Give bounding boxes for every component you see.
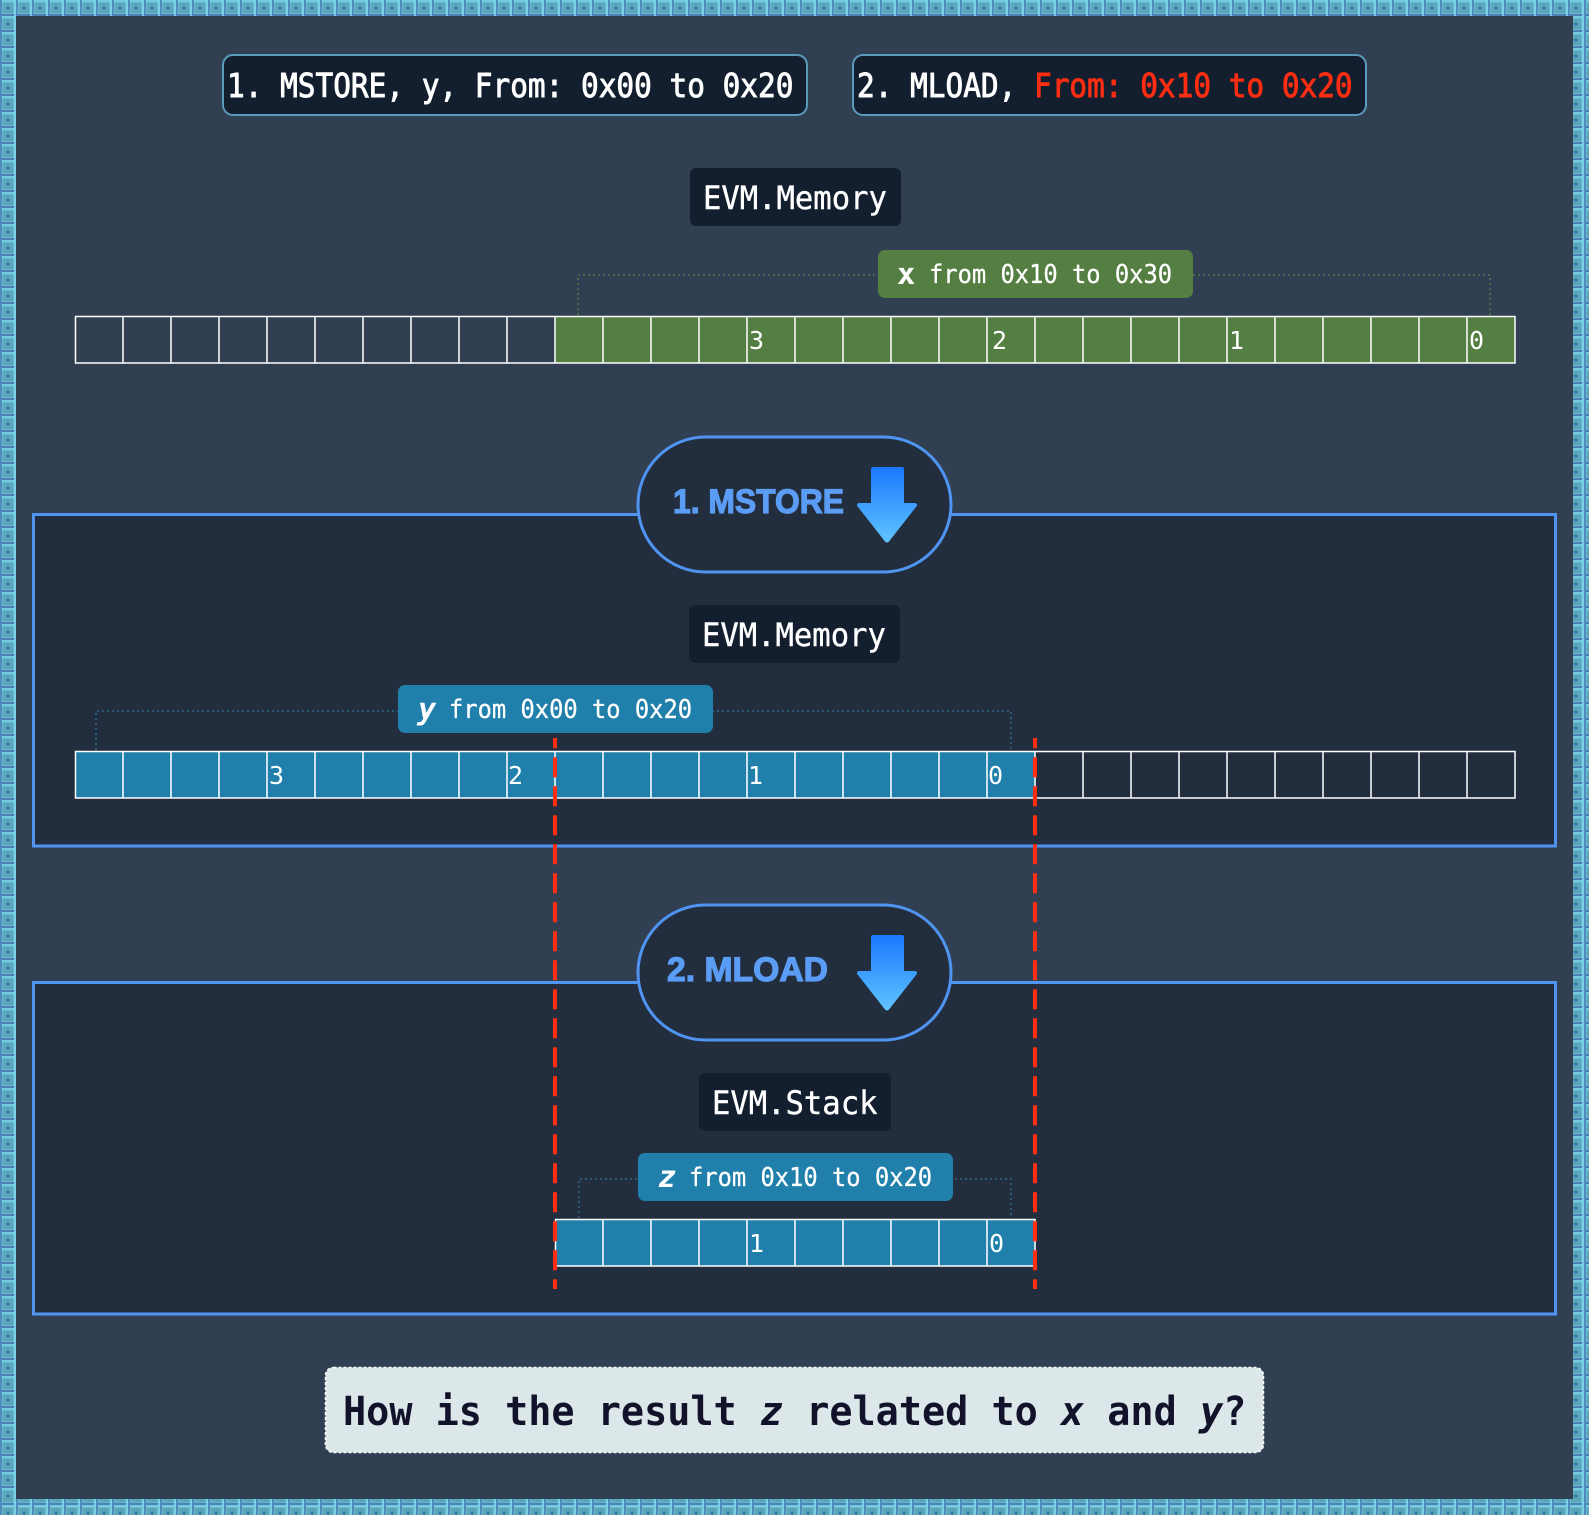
memory row: x stored bbox=[76, 316, 1515, 363]
memory row: x stored: 1 bbox=[1229, 326, 1244, 355]
question box: How is the result z related to x and y? bbox=[343, 1389, 1246, 1435]
memory row: y stored: 1 bbox=[748, 761, 763, 790]
bracket: x range bbox=[578, 275, 1490, 315]
bracket: y range bbox=[96, 711, 1011, 750]
label: x range: from 0x10 to 0x30 bbox=[929, 259, 1172, 289]
memory row: y stored: 3 bbox=[269, 761, 284, 790]
label: y range bbox=[398, 685, 713, 733]
stack row: z loaded: 1 bbox=[749, 1229, 764, 1258]
pill: 1. MSTORE: 1. MSTORE bbox=[673, 483, 844, 521]
memory row: y stored bbox=[76, 751, 1515, 798]
bracket: z range bbox=[579, 1179, 1011, 1218]
label: y range: y bbox=[416, 692, 437, 727]
memory row: x stored: 3 bbox=[749, 326, 764, 355]
stack row: z loaded: 0 bbox=[989, 1229, 1004, 1258]
memory row: x stored: 0 bbox=[1469, 326, 1484, 355]
heading: EVM.Memory panel bbox=[689, 605, 900, 663]
label: z range bbox=[638, 1153, 953, 1201]
question box bbox=[326, 1368, 1264, 1452]
label: z range: from 0x10 to 0x20 bbox=[689, 1162, 932, 1192]
instruction box 1: MSTORE: 1. MSTORE, y, From: 0x00 to 0x20 bbox=[227, 67, 793, 105]
pill: 2. MLOAD: 2. MLOAD bbox=[667, 951, 828, 989]
stack row: z loaded bbox=[556, 1219, 1035, 1266]
pill: 1. MSTORE bbox=[638, 437, 951, 572]
heading: EVM.Stack: EVM.Stack bbox=[712, 1085, 878, 1122]
label: x range bbox=[878, 250, 1193, 298]
heading: EVM.Memory panel: EVM.Memory bbox=[702, 617, 886, 654]
label: x range: x bbox=[897, 258, 915, 292]
heading: EVM.Memory top: EVM.Memory bbox=[703, 180, 887, 217]
panel: MLOAD bbox=[34, 982, 1556, 1314]
heading: EVM.Stack bbox=[699, 1073, 891, 1131]
instruction box 2: MLOAD bbox=[853, 55, 1366, 115]
memory row: x stored: 2 bbox=[992, 326, 1007, 355]
memory row: y stored: 2 bbox=[508, 761, 523, 790]
panel: MSTORE bbox=[34, 514, 1556, 846]
instruction box 2: MLOAD: 2. MLOAD, From: 0x10 to 0x20 bbox=[857, 67, 1353, 105]
red dashed guides bbox=[555, 738, 1035, 1289]
instruction box 1: MSTORE bbox=[223, 55, 807, 115]
heading: EVM.Memory top bbox=[690, 168, 901, 226]
pill: 2. MLOAD bbox=[638, 905, 951, 1040]
label: y range: from 0x00 to 0x20 bbox=[449, 694, 692, 724]
label: z range: z bbox=[658, 1160, 676, 1195]
memory row: y stored: 0 bbox=[988, 761, 1003, 790]
